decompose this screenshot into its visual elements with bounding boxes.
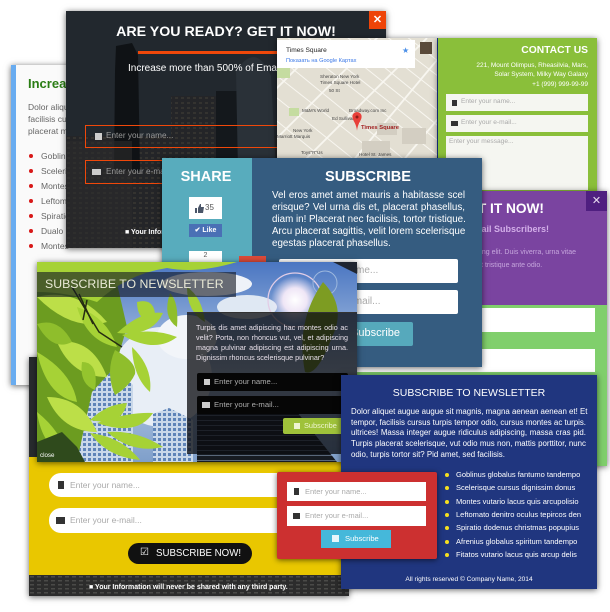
map streets: 50 St [329, 88, 340, 93]
yellow bullet list: Fitatos vutario lacus quis arcup delis [456, 550, 577, 559]
orange divider [138, 51, 314, 54]
message field: Enter your message... [449, 138, 514, 145]
subscribe now button [128, 543, 252, 564]
panel: share and subscribe [162, 158, 482, 367]
email input [279, 290, 458, 314]
email input [85, 160, 367, 184]
name input: Enter your name... [296, 265, 378, 276]
purple subtitle: Increase Email Subscribers! [428, 224, 549, 234]
navy text: Turpis placerat scelerisque, vut odio mus non, mattis porttitor, nunc [351, 439, 586, 448]
navy text [351, 407, 588, 459]
like counter [189, 197, 222, 219]
panel: red subscribe box [277, 472, 437, 559]
yellow bullet list: Afrenius globalus spiritum tandempo [456, 537, 577, 546]
subscribe text: Vel eros amet amet mauris a habitasse scel [272, 190, 465, 201]
form text: Turpis dis amet adipiscing hac montes odio ac [196, 323, 348, 332]
name field: Enter your name... [461, 98, 515, 105]
paragraph: placerat mattis [28, 126, 83, 136]
email field [446, 115, 588, 132]
check icon: ☑ [140, 547, 149, 558]
city footer strip [30, 576, 349, 594]
button label: SUBSCRIBE NOW! [156, 548, 241, 559]
form text: Dignissim rhoncus scelerisque pulvinar? [196, 353, 324, 362]
name pill: Enter your name... [70, 480, 140, 490]
like button [189, 224, 222, 237]
yellow bullet list: Scelerisque cursus dignissim donus [456, 483, 575, 492]
map info card: Показать на Google Картах [286, 58, 356, 64]
subscribe button [321, 530, 391, 548]
name field [446, 94, 588, 111]
email input: Enter your e-mail... [106, 167, 175, 176]
yellow bullet list [445, 470, 581, 559]
navy text: tempor, facilisis cursus turpis tempor odio, cursus montes ac turpis. [351, 418, 586, 427]
paragraph: Dolor aliquet [28, 102, 76, 112]
name input: Enter your name... [214, 377, 277, 386]
purple close [586, 191, 607, 211]
subscribe text [272, 190, 466, 249]
email pill [49, 508, 349, 533]
second counter [189, 251, 222, 271]
name input [85, 125, 367, 148]
subscribe button: Subscribe [304, 421, 337, 430]
title bar [37, 272, 236, 297]
subscribe text: Arcu placerat sagittis, velit lorem scelerisque [272, 226, 465, 237]
name input [287, 482, 426, 501]
address: Solar System, Milky Way Galaxy [494, 71, 588, 78]
contact heading: CONTACT US [521, 45, 588, 56]
form text: magna pulvinar adipiscing est adipiscing urna. [196, 343, 348, 352]
email input: Enter your e-mail... [296, 296, 380, 307]
photo background with leaves [37, 262, 357, 462]
email input: Enter your e-mail... [305, 511, 368, 520]
navy text: Dolor aliquet augue augue sit magnis, magna aenean aenean et! Et [351, 407, 587, 416]
map streets: Hotel St. James [359, 152, 392, 157]
panel: increase list popup [11, 65, 331, 385]
message field [446, 136, 588, 190]
red bullet list [29, 151, 85, 251]
subscribe button [312, 322, 413, 346]
map streets: Sheraton New York [320, 74, 360, 79]
purple body [458, 248, 576, 269]
share heading: SHARE [181, 169, 231, 185]
map streets: Times Square Hotel [320, 80, 360, 85]
red bullet list: Spiratio [41, 211, 70, 221]
panel: yellow subscribe popup [29, 357, 349, 596]
name input: Enter your name... [106, 131, 173, 140]
paragraph [28, 102, 83, 136]
name input [197, 373, 348, 391]
map streets: Broadway.com Inc [349, 108, 387, 113]
map info card: Times Square [286, 47, 327, 54]
map pin [352, 112, 362, 130]
navy title: SUBSCRIBE TO NEWSLETTER [393, 387, 545, 399]
privacy note: ■ Your Information [125, 229, 187, 236]
like button: ✔ Like [195, 227, 216, 234]
privacy note: ■ Your Information will never be shared with any third party. [89, 584, 288, 591]
red bullet list: Scelerisque [41, 166, 85, 176]
map label: Times Square [361, 125, 399, 131]
red bullet list: Montes [41, 181, 69, 191]
map streets: M&M's World [302, 108, 330, 113]
subscribe text: egestas placerat phasellus. [272, 238, 391, 249]
address [476, 62, 588, 88]
form text [196, 323, 348, 362]
share sidebar [162, 158, 252, 367]
paragraph: facilisis cursus [28, 114, 83, 124]
close button [369, 11, 386, 29]
panel: purple and green popup [287, 191, 607, 466]
purple body: sit amet tristique ante odio. [458, 262, 542, 269]
address: 221, Mount Olimpus, Rheasilvia, Mars, [476, 62, 588, 69]
subscribe button: Subscribe [345, 534, 379, 543]
close link: close [40, 452, 54, 459]
red bullet list: Goblinus [41, 151, 75, 161]
email input [197, 396, 348, 414]
name pill [49, 473, 349, 497]
google plus button [239, 256, 252, 271]
purple title: ARE YOU READY? GET IT NOW! [332, 201, 544, 216]
email pill: Enter your e-mail... [70, 515, 142, 525]
email input [287, 506, 426, 526]
navy text: odio, turpis tortor sit? Pid amet, sed facilisis. [351, 450, 505, 459]
panel: navy newsletter [341, 375, 597, 589]
form text: velit? Porta, non rhoncus vut, vel, et adipiscing [196, 333, 348, 342]
title: SUBSCRIBE TO NEWSLETTER [45, 277, 224, 291]
map info card [277, 40, 415, 68]
like counter: 35 [205, 203, 214, 212]
subscribe text: diam in! Placerat nec facilisis, tortor tristique. [272, 214, 466, 225]
second counter: 2 [204, 252, 207, 259]
close button: ✕ [373, 14, 382, 26]
panel: map [277, 38, 438, 178]
map streets: Toys"R"Us [301, 150, 323, 155]
red bullet list: Montes [41, 241, 69, 251]
title: ARE YOU READY? GET IT NOW! [116, 24, 336, 40]
address: +1 (999) 999-99-99 [532, 81, 588, 88]
navy footer: All rights reserved © Company Name, 2014 [405, 576, 533, 583]
subscribe heading: SUBSCRIBE [325, 169, 411, 185]
panel: photo newsletter popup [37, 262, 357, 462]
map info card: ★ [402, 46, 409, 55]
map streets: Ed Sullivan [332, 116, 355, 121]
yellow bullet list: Spiratio dodenus christmas popupius [456, 523, 579, 532]
map streets: Marriott Marquis [277, 134, 311, 139]
panel: contact us [438, 38, 597, 203]
purple body: adipiscing elit. Duis viverra, urna vitae [458, 249, 576, 256]
subscribe button: Subscribe [351, 327, 400, 339]
yellow bullet list: Goblinus globalus fantumo tandempo [456, 470, 580, 479]
map streets [277, 38, 437, 158]
red bullet list: Leftomato [41, 196, 79, 206]
subtitle: Increase more than 500% of Email Subscribers! [128, 63, 340, 74]
red bullet list: Dualo [41, 226, 63, 236]
subscribe button [283, 418, 348, 434]
navy text: ultrices! Massa integer augue ridiculus adipiscing, massa cras pid. [351, 428, 586, 437]
city background [66, 43, 275, 248]
purple close: ✕ [592, 195, 601, 207]
dark form box [187, 312, 357, 454]
yellow bullet list: Montes vutario lacus quis arcupolisio [456, 497, 579, 506]
yellow band [29, 457, 349, 575]
map streets: New York [293, 128, 313, 133]
name input [279, 259, 458, 283]
email field: Enter your e-mail... [461, 119, 517, 126]
name input: Enter your name... [305, 487, 367, 496]
subscribe text: erisque? Vel urna dis et, placerat phasellus, [272, 202, 465, 213]
email input: Enter your e-mail... [214, 400, 279, 409]
heading: Increase [28, 76, 81, 91]
panel: are you ready dark popup [66, 11, 386, 248]
white fields [307, 308, 595, 332]
yellow bullet list: Leftomato denitro oculus tepircos den [456, 510, 581, 519]
